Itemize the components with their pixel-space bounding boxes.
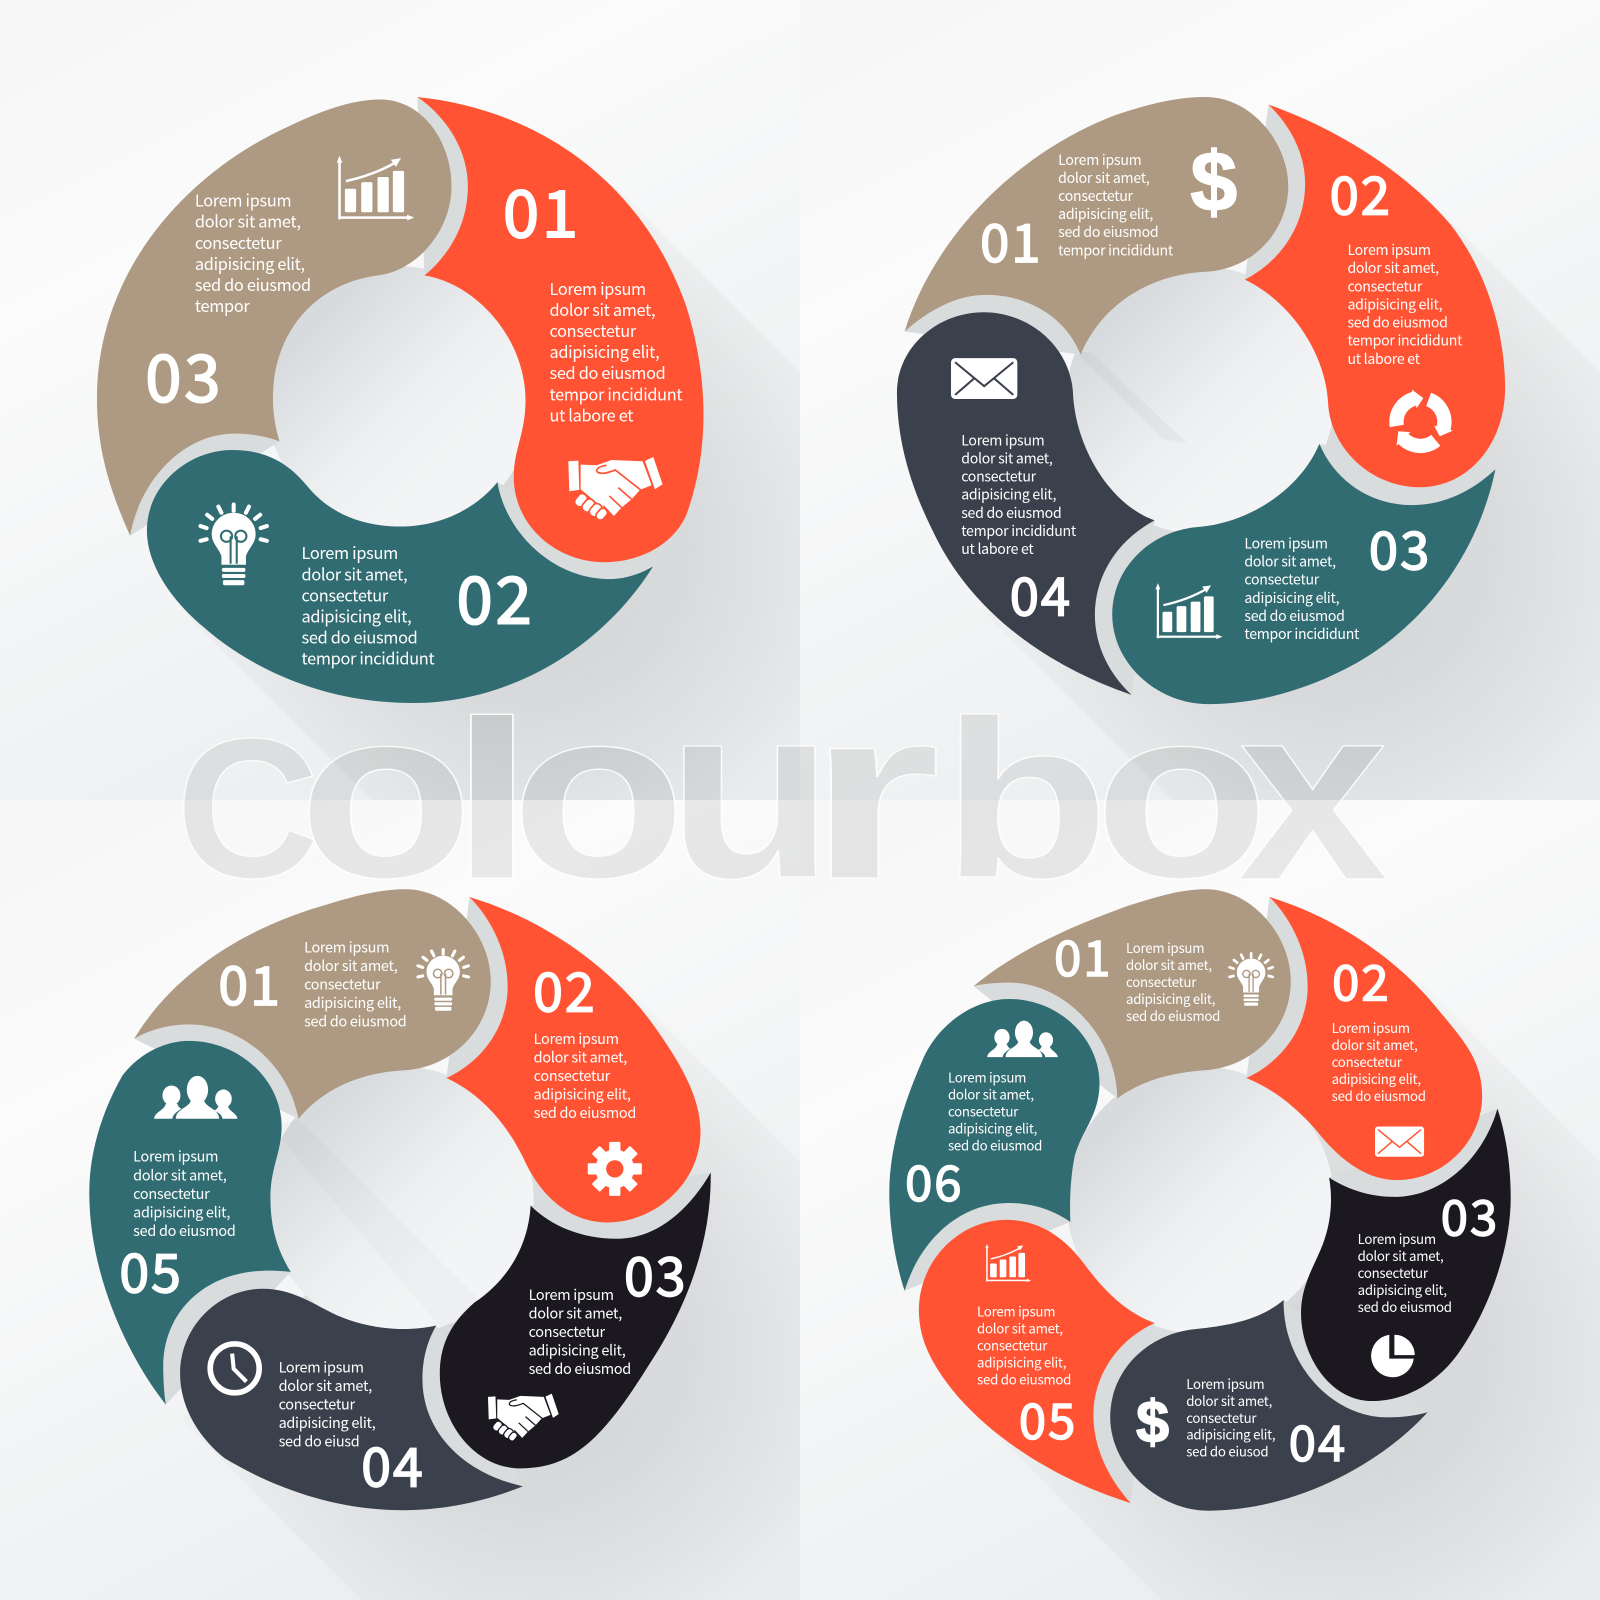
segment 02 red: consectetur <box>534 1065 611 1086</box>
segment 03 teal: adipisicing elit, <box>1244 588 1340 608</box>
segment 03 brown <box>97 99 452 536</box>
segment 01 brown: sed do eiusmod <box>1058 222 1158 242</box>
segment 02 red: 02 <box>1332 945 1391 1016</box>
segment 06 teal <box>889 999 1099 1291</box>
centre hole <box>1066 266 1334 534</box>
icon: dollar: $ <box>1190 135 1237 229</box>
segment 01 brown: 01 <box>980 202 1043 278</box>
watermark: u <box>667 652 834 930</box>
segment 03 black: sed do eiusmod <box>1358 1297 1452 1316</box>
icon: light bulb <box>201 505 267 585</box>
segment 02 red: consectetur <box>1332 1052 1403 1071</box>
segment 03 teal: Lorem ipsum <box>1244 533 1328 553</box>
segment 01 brown: 01 <box>1054 920 1113 991</box>
segment 05 teal: consectetur <box>133 1183 210 1204</box>
segment 02 red: consectetur <box>1347 276 1423 296</box>
segment 01 brown: adipisicing elit, <box>1126 989 1215 1008</box>
segment 01 red: consectetur <box>549 318 637 342</box>
segment 03 brown: dolor sit amet, <box>195 209 301 233</box>
segment 02 teal: adipisicing elit, <box>302 603 411 627</box>
segment 02 teal: consectetur <box>302 582 389 606</box>
segment 04 slate: consectetur <box>1186 1408 1257 1427</box>
segment 03 brown: 03 <box>145 327 223 421</box>
segment 02 red: dolor sit amet, <box>1332 1035 1417 1054</box>
panel: three-step circle <box>0 97 800 800</box>
segment 02 red <box>1245 105 1505 487</box>
icon: handshake <box>568 457 663 522</box>
segment 02 teal: sed do eiusmod <box>302 624 418 648</box>
segment 02 red: adipisicing elit, <box>1332 1069 1421 1088</box>
segment 05 red: adipisicing elit, <box>977 1352 1066 1371</box>
icon: dollar: $ <box>1136 1388 1169 1455</box>
segment 01 red: adipisicing elit, <box>549 339 659 363</box>
segment 01 brown: Lorem ipsum <box>1058 150 1141 170</box>
long shadow <box>1056 264 1600 800</box>
segment 03 black <box>440 1172 711 1468</box>
panel: five-step circle <box>0 889 800 1600</box>
segment 02 teal: Lorem ipsum <box>302 540 398 564</box>
segment 01 brown: tempor incididunt <box>1058 240 1174 260</box>
segment 01 brown: consectetur <box>1126 972 1197 991</box>
segment 06 teal: consectetur <box>948 1102 1019 1121</box>
segment 04 slate: Lorem ipsum <box>1186 1374 1264 1393</box>
long shadow <box>1066 1064 1600 1600</box>
segment 01 red: tempor incididunt <box>549 381 682 405</box>
segment 03 black: adipisicing elit, <box>529 1340 626 1361</box>
segment 03 brown: consectetur <box>195 230 282 254</box>
segment 02 teal: tempor incididunt <box>302 646 434 670</box>
segment 02 teal: dolor sit amet, <box>302 561 407 585</box>
icon: people <box>987 1021 1058 1057</box>
segment 01 brown: sed do eiusmod <box>1126 1006 1220 1025</box>
segment 01 brown: adipisicing elit, <box>304 992 401 1013</box>
segment 04 slate: sed do eiusod <box>1186 1442 1268 1461</box>
segment 05 teal: Lorem ipsum <box>133 1146 218 1167</box>
segment 03 black: Lorem ipsum <box>1358 1229 1436 1248</box>
segment 04 slate: adipisicing elit, <box>961 485 1056 505</box>
hole streak <box>1076 352 1188 444</box>
segment 01 red <box>417 97 703 562</box>
segment 01 brown: consectetur <box>1058 186 1134 206</box>
segment 02 red: adipisicing elit, <box>1347 294 1443 314</box>
segment 02 red: tempor incididunt <box>1347 331 1463 351</box>
segment 06 teal: sed do eiusmod <box>948 1136 1042 1155</box>
watermark: l <box>450 673 535 926</box>
segment 03 brown: adipisicing elit, <box>195 251 305 275</box>
joint shadows <box>905 897 1497 1503</box>
segment 01 red: 01 <box>503 162 581 256</box>
segment 01 brown <box>134 889 491 1119</box>
segment 01 brown: dolor sit amet, <box>1126 955 1212 974</box>
segment 03 black: dolor sit amet, <box>529 1303 622 1324</box>
watermark: o <box>1094 659 1270 929</box>
segment 02 red: Lorem ipsum <box>1347 240 1431 260</box>
segment 03 teal: sed do eiusmod <box>1244 606 1345 626</box>
segment 05 red: dolor sit amet, <box>977 1318 1063 1337</box>
panel: six-step circle <box>800 889 1600 1600</box>
segment 03 black: consectetur <box>529 1321 605 1342</box>
icon: growth chart <box>1155 583 1222 639</box>
icon: growth chart <box>337 156 414 220</box>
segment 02 red <box>1246 897 1482 1180</box>
watermark: b <box>941 673 1110 925</box>
watermark: C <box>176 698 320 920</box>
segment 03 black <box>1301 1109 1511 1401</box>
segment 04 slate: 04 <box>1289 1405 1347 1476</box>
segment 05 teal: dolor sit amet, <box>133 1164 227 1185</box>
panel: four-step circle <box>800 97 1600 800</box>
segment 02 red: sed do eiusmod <box>534 1102 636 1123</box>
segment 05 red: 05 <box>1019 1383 1077 1454</box>
segment 05 red: consectetur <box>977 1335 1048 1354</box>
joint shadows <box>130 97 503 536</box>
segment 04 slate: consectetur <box>961 467 1037 487</box>
segment 03 brown: Lorem ipsum <box>195 188 291 212</box>
segment 01 brown: adipisicing elit, <box>1058 204 1153 224</box>
icon: gear <box>588 1142 642 1196</box>
long shadow <box>270 1068 800 1600</box>
segment 03 black: 03 <box>1441 1180 1499 1251</box>
segment 06 teal: 06 <box>905 1145 964 1216</box>
segment 03 black: dolor sit amet, <box>1358 1246 1443 1265</box>
segment 03 brown: tempor <box>195 293 250 317</box>
segment 04 slate: dolor sit amet, <box>279 1375 372 1396</box>
segment 04 slate: Lorem ipsum <box>961 430 1044 450</box>
segment 03 black: consectetur <box>1358 1263 1429 1282</box>
segment 01 brown: Lorem ipsum <box>1126 938 1204 957</box>
segment 02 red: 02 <box>1330 154 1392 230</box>
watermark: o <box>298 659 474 929</box>
segment 05 red: Lorem ipsum <box>977 1301 1055 1320</box>
segment 04 slate: tempor incididunt <box>961 521 1077 541</box>
segment 05 teal: adipisicing elit, <box>133 1201 230 1222</box>
icon: light bulb <box>1230 953 1273 1006</box>
segment 05 teal: 05 <box>119 1231 183 1308</box>
segment 01 brown: sed do eiusmod <box>304 1011 406 1032</box>
segment 01 brown <box>973 889 1291 1098</box>
segment 05 red <box>919 1220 1155 1503</box>
icon: people <box>154 1076 237 1119</box>
segment 04 slate: sed do eiusd <box>279 1431 359 1452</box>
segment 01 red: dolor sit amet, <box>549 297 655 321</box>
icon: cycle <box>1390 389 1453 453</box>
segment 01 brown: consectetur <box>304 974 381 995</box>
segment 02 teal <box>147 450 653 703</box>
segment 04 slate: adipisicing elit, <box>1186 1425 1275 1444</box>
segment 01 brown: dolor sit amet, <box>304 955 398 976</box>
segment 02 red: sed do eiusmod <box>1347 313 1448 333</box>
long shadow <box>258 257 800 800</box>
segment 03 teal: consectetur <box>1244 570 1320 590</box>
segment 01 brown: 01 <box>218 944 282 1021</box>
segment 04 slate: 04 <box>1010 555 1072 631</box>
segment 02 red: Lorem ipsum <box>534 1028 619 1049</box>
segment 01 red: sed do eiusmod <box>549 360 665 384</box>
segment 03 black: sed do eiusmod <box>529 1358 631 1379</box>
segment 01 brown: dolor sit amet, <box>1058 168 1150 188</box>
segment 06 teal: dolor sit amet, <box>948 1085 1034 1104</box>
segment 04 slate: Lorem ipsum <box>279 1356 364 1377</box>
segment 03 black: adipisicing elit, <box>1358 1280 1447 1299</box>
icon: envelope <box>1375 1127 1424 1157</box>
segment 03 teal <box>1112 444 1495 704</box>
segment 04 slate: sed do eiusmod <box>961 503 1061 523</box>
segment 02 red: adipisicing elit, <box>534 1083 631 1104</box>
segment 05 teal <box>89 1041 291 1405</box>
segment 02 red: dolor sit amet, <box>1347 258 1439 278</box>
icon: growth chart <box>985 1244 1031 1282</box>
centre hole <box>1066 1066 1334 1334</box>
segment 05 teal: sed do eiusmod <box>133 1220 236 1241</box>
segment 03 teal: dolor sit amet, <box>1244 552 1336 572</box>
segment 02 red: sed do eiusmod <box>1332 1086 1426 1105</box>
segment 01 brown <box>905 97 1288 355</box>
centre hole <box>266 1066 534 1334</box>
segment 04 slate: dolor sit amet, <box>961 449 1053 469</box>
centre hole <box>266 266 534 534</box>
segment 04 slate: ut labore et <box>961 539 1034 559</box>
segment 04 slate <box>1110 1300 1428 1511</box>
segment 04 slate: 04 <box>361 1426 425 1503</box>
segment 02 red: dolor sit amet, <box>534 1046 627 1067</box>
segment 01 red: ut labore et <box>549 402 633 426</box>
segment 03 teal: 03 <box>1369 509 1431 585</box>
icon: clock <box>210 1344 259 1393</box>
watermark: x <box>1238 652 1388 933</box>
segment 02 red: Lorem ipsum <box>1332 1018 1410 1037</box>
joint shadows <box>134 897 710 1404</box>
segment 04 slate: dolor sit amet, <box>1186 1391 1272 1410</box>
segment 01 brown: Lorem ipsum <box>304 937 389 958</box>
icon: envelope <box>951 358 1017 399</box>
joint shadows <box>905 105 1326 694</box>
segment 04 slate <box>897 312 1155 695</box>
icon: light bulb <box>418 950 468 1011</box>
segment 01 red: Lorem ipsum <box>549 276 646 300</box>
segment 02 red: 02 <box>533 951 597 1028</box>
segment 04 slate <box>180 1289 523 1510</box>
segment 03 brown: sed do eiusmod <box>195 272 311 296</box>
icon: handshake <box>488 1394 559 1442</box>
segment 03 teal: tempor incididunt <box>1244 624 1360 644</box>
watermark: o <box>510 659 686 929</box>
icon: pie chart <box>1371 1335 1415 1377</box>
segment 06 teal: adipisicing elit, <box>948 1119 1037 1138</box>
segment 04 slate: consectetur <box>279 1393 355 1414</box>
segment 03 black: Lorem ipsum <box>529 1284 614 1305</box>
segment 02 teal: 02 <box>457 548 535 642</box>
segment 02 red: ut labore et <box>1347 349 1421 369</box>
watermark: r <box>807 656 941 930</box>
segment 04 slate: adipisicing elit, <box>279 1412 376 1433</box>
segment 02 red <box>446 897 701 1222</box>
segment 03 black: 03 <box>624 1235 688 1312</box>
hole streak <box>270 1119 510 1331</box>
segment 06 teal: Lorem ipsum <box>948 1068 1026 1087</box>
segment 05 red: sed do eiusmod <box>977 1369 1071 1388</box>
